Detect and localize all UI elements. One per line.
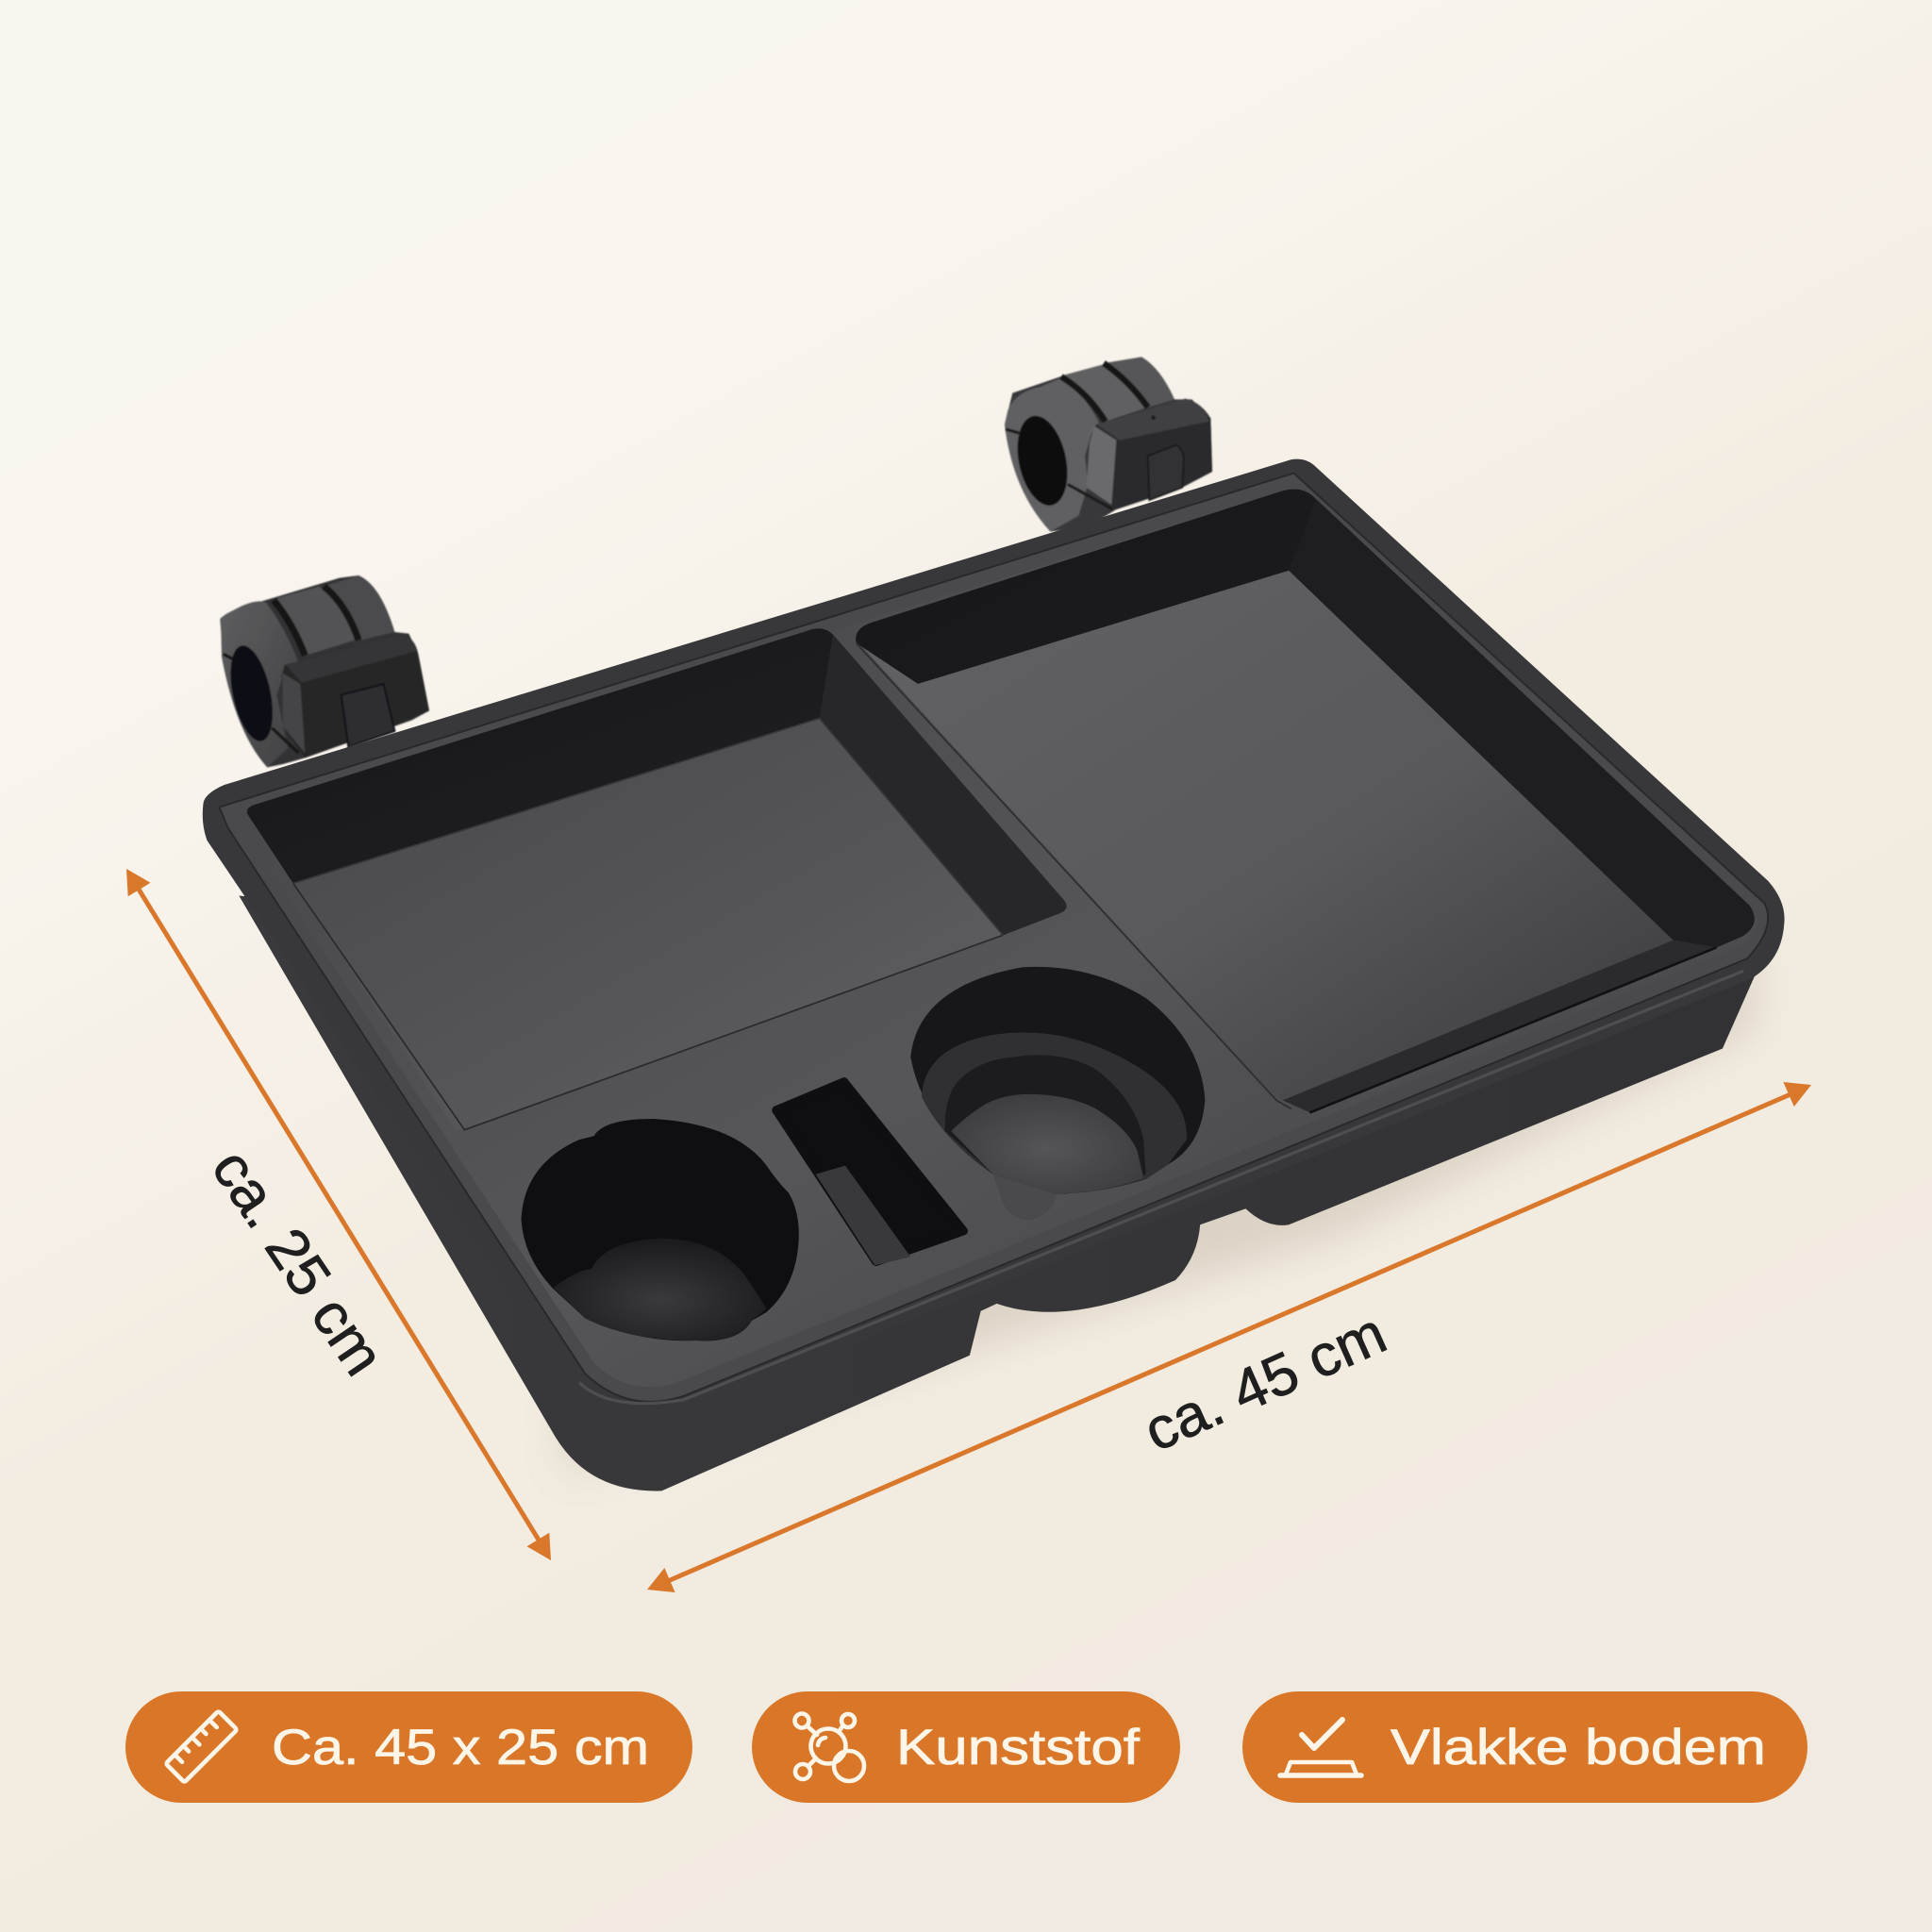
slot opening xyxy=(776,1082,963,1261)
rim highlight xyxy=(579,971,1743,1404)
left pocket walls xyxy=(247,628,1067,935)
left pocket floor xyxy=(293,718,1003,1130)
clamp: right xyxy=(1005,357,1212,531)
right pocket walls xyxy=(856,489,1755,947)
pill text: flat bottom: Vlakke bodem xyxy=(1391,1720,1766,1775)
tray xyxy=(203,459,1785,1491)
cup notch xyxy=(993,1174,1056,1220)
label: ca. 25 cm: ca. 25 cm xyxy=(199,1138,396,1387)
right cup holder xyxy=(910,967,1205,1220)
cup inner well xyxy=(945,1055,1146,1194)
right pocket floor xyxy=(862,571,1674,1100)
right pocket xyxy=(856,489,1755,1112)
icon: flat surface check xyxy=(1280,1720,1361,1775)
pill text: size: Ca. 45 x 25 cm xyxy=(272,1720,649,1775)
clamp: left xyxy=(220,575,429,767)
card slot xyxy=(776,1082,963,1265)
tray rim xyxy=(203,459,1785,1418)
dimension arrow: depth xyxy=(126,869,551,1560)
cup opening xyxy=(910,967,1205,1220)
tray rim inner ledge xyxy=(219,474,1768,1402)
left pocket xyxy=(247,628,1067,1130)
tray body underside xyxy=(239,896,1756,1491)
dimension arrow: width xyxy=(647,1082,1811,1592)
label: ca. 45 cm: ca. 45 cm xyxy=(1135,1301,1395,1464)
right pocket front lip xyxy=(1283,941,1716,1112)
cup floor xyxy=(951,1094,1143,1194)
cup opening xyxy=(521,1119,799,1341)
cup shelf xyxy=(922,1033,1187,1194)
pill text: material: Kunststof xyxy=(896,1720,1140,1775)
cup floor xyxy=(553,1239,766,1341)
slot floor xyxy=(816,1166,910,1265)
pill: material xyxy=(752,1691,1180,1803)
icon: ruler xyxy=(166,1711,237,1782)
pill: size xyxy=(125,1691,692,1803)
pill: flat bottom xyxy=(1242,1691,1807,1803)
tray shadow on surface xyxy=(566,943,1755,1472)
left cup holder xyxy=(521,1119,799,1341)
icon: molecule xyxy=(794,1713,864,1781)
tray deck xyxy=(234,488,1758,1387)
